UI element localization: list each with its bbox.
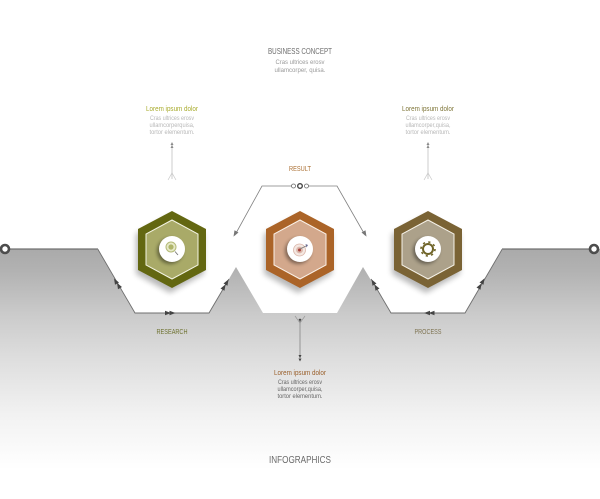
heading: business concept: ullamcorper, quisa. xyxy=(274,67,326,74)
text block: bottom: Lorem ipsum dolor xyxy=(274,370,327,377)
hexagon: research xyxy=(136,211,206,293)
heading: business concept xyxy=(268,47,332,74)
vertical arrow: left xyxy=(168,142,176,180)
hexagon: result xyxy=(264,211,334,293)
heading: business concept: BUSINESS CONCEPT xyxy=(268,47,332,56)
text block: right: ullamcorper,quisa, xyxy=(406,123,451,129)
icon: magnifier xyxy=(166,242,178,255)
text block: bottom: Cras ultrices erosv xyxy=(278,380,322,386)
icon: target xyxy=(294,244,308,256)
text block: left: tortor elementum. xyxy=(150,130,195,136)
right connector line with arrows xyxy=(370,249,595,315)
label: process: PROCESS xyxy=(414,327,442,336)
left end node xyxy=(1,245,9,253)
right end node xyxy=(590,245,598,253)
label: result: RESULT xyxy=(289,164,311,173)
icon: gear xyxy=(421,242,435,256)
vertical arrow: right xyxy=(424,142,432,180)
text block: right: tortor elementum. xyxy=(406,130,451,136)
text block: left: Cras ultrices erosv xyxy=(150,116,194,122)
text block: right: Lorem ipsum dolor xyxy=(402,106,455,113)
text block: bottom: tortor elementum. xyxy=(278,394,323,400)
text block: right xyxy=(402,106,455,136)
hexagon: process xyxy=(392,211,462,293)
text block: left xyxy=(146,106,199,136)
text block: left: Lorem ipsum dolor xyxy=(146,106,199,113)
top bracket connector xyxy=(232,184,368,238)
text block: right: Cras ultrices erosv xyxy=(406,116,450,122)
text block: left: ullamcorperquisa, xyxy=(150,123,195,129)
footer label: infographics: INFOGRAPHICS xyxy=(269,455,331,466)
text block: bottom: ullamcorper,quisa, xyxy=(278,387,323,393)
vertical arrow: bottom xyxy=(295,316,305,362)
left connector line with arrows xyxy=(5,249,230,315)
label: research: RESEARCH xyxy=(156,327,188,336)
heading: business concept: Cras ultrices erosv xyxy=(276,59,325,66)
text block: bottom xyxy=(274,370,327,400)
grey landscape background xyxy=(0,249,600,470)
